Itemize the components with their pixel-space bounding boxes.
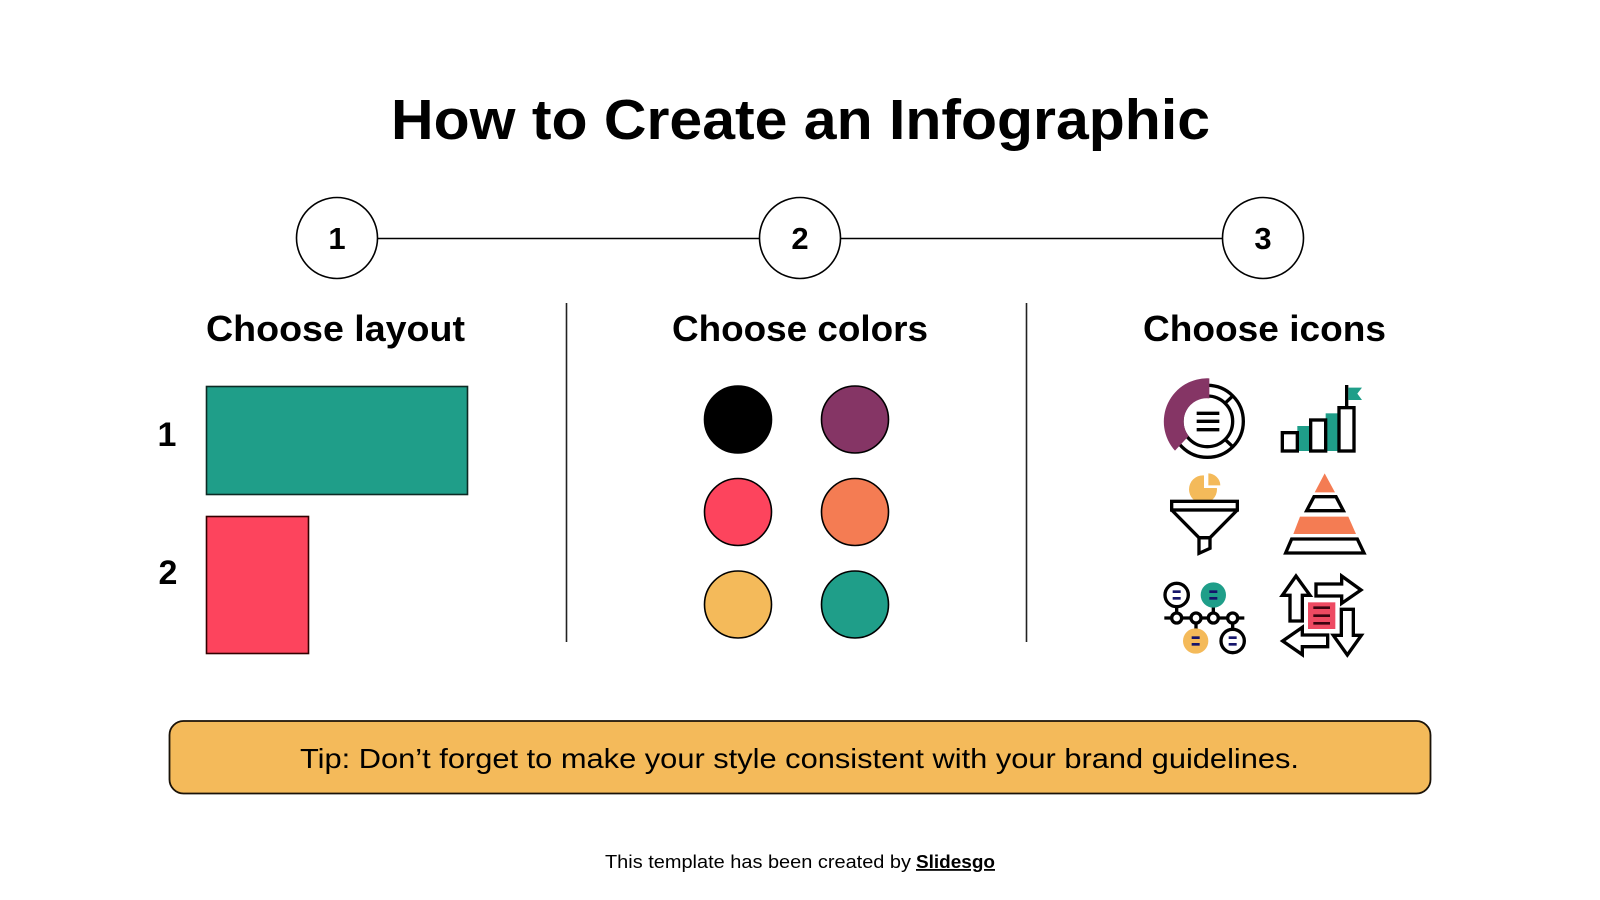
icon set (1164, 378, 1364, 655)
colour swatches (704, 386, 888, 638)
layout option 2: 2 (159, 554, 177, 592)
panel: choose colors (672, 308, 928, 638)
heading: choose colors: Choose colors (672, 308, 928, 349)
heading: choose layout: Choose layout (206, 308, 465, 349)
step 2 marker (760, 198, 840, 278)
step 1 marker: 1 (328, 221, 346, 256)
heading: choose icons: Choose icons (1143, 308, 1386, 349)
step timeline (296, 198, 1304, 278)
step 3 marker (1222, 198, 1304, 278)
step 1 marker (296, 198, 378, 278)
title: How to Create an Infographic (391, 88, 1210, 152)
icon: funnel with pie (1172, 471, 1237, 553)
layout option 2 (159, 516, 308, 654)
layout option 1: 1 (158, 416, 176, 454)
layout option 1 (158, 386, 468, 494)
icon: cycle arrows (1282, 576, 1361, 655)
icon: timeline nodes (1164, 582, 1244, 654)
panel: choose icons (1143, 308, 1386, 655)
icon: layered pyramid (1286, 473, 1364, 553)
footer credit: This template has been created by (605, 852, 911, 872)
footer credit: Slidesgo (916, 852, 995, 872)
step 3 marker: 3 (1254, 221, 1272, 256)
icon: growth bars with flag (1282, 385, 1362, 451)
panel: choose layout (158, 308, 468, 654)
tip callout (170, 721, 1430, 794)
icon: donut chart (1164, 378, 1243, 457)
tip callout: Tip: Don’t forget to make your style consistent with your brand guidelines. (300, 743, 1299, 774)
step 2 marker: 2 (791, 221, 809, 256)
